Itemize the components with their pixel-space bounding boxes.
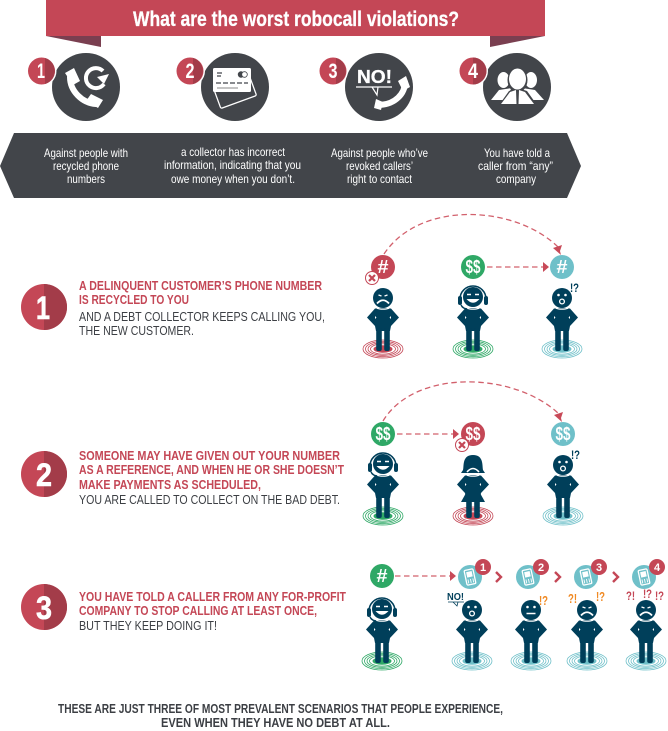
figure: you, call 4: !? <box>643 587 652 601</box>
figure: delinquent customer: # <box>378 257 388 277</box>
figure: debt collector: $$ <box>466 257 480 277</box>
icon: credit cards <box>175 53 269 121</box>
arrow: curved from customer to you <box>384 214 562 255</box>
text: violation 2 <box>164 145 301 186</box>
dark arrow band <box>0 133 581 198</box>
icon: no call: 3 <box>328 60 338 83</box>
figure: you: $$ <box>556 424 570 444</box>
text: violation 3: right to contact <box>347 172 413 186</box>
figure: debt collector <box>362 564 402 670</box>
text: violation 1: recycled phone <box>53 159 119 173</box>
figure: you: !? <box>570 281 579 295</box>
figure: you, call 4 <box>626 559 666 670</box>
chevron <box>555 572 560 582</box>
figure: reference woman <box>453 422 493 525</box>
chevron <box>613 572 618 582</box>
arrow: collector to you <box>395 571 456 581</box>
scenario 2 number: 2 <box>36 457 52 493</box>
title banner <box>46 0 545 47</box>
figure: you, call 4: !? <box>655 589 664 603</box>
figure: you, call 2: 2 <box>538 562 544 574</box>
scenario 2 text <box>79 448 344 507</box>
scenario 1 text: AND A DEBT COLLECTOR KEEPS CALLING YOU, <box>79 309 325 324</box>
scenario 2 text: SOMEONE MAY HAVE GIVEN OUT YOUR NUMBER <box>79 448 341 463</box>
chevron <box>496 572 501 582</box>
arrow: collector to you <box>487 262 549 272</box>
footer note: THESE ARE JUST THREE OF MOST PREVALENT SCENARIOS THAT PEOPLE EXPERIENCE, <box>58 702 503 716</box>
text: violation 2: a collector has incorrect <box>181 145 286 159</box>
figure: you, call 2 <box>511 559 551 670</box>
scenario 3 text: YOU HAVE TOLD A CALLER FROM ANY FOR-PROFIT <box>79 589 346 604</box>
text: violation 4 <box>478 146 553 186</box>
icon: no call <box>318 53 413 121</box>
text: violation 4: company <box>496 172 536 186</box>
scenario 3 diagram <box>362 559 666 670</box>
figure: you, call 3: !? <box>596 589 605 604</box>
icon: group of callers: 4 <box>468 60 478 83</box>
text: violation 1: Against people with <box>44 146 128 160</box>
scenario 3 text: COMPANY TO STOP CALLING AT LEAST ONCE, <box>79 603 317 618</box>
text: violation 3: Against people who’ve <box>331 146 428 160</box>
text: violation 2: owe money when you don’t. <box>171 172 295 186</box>
figure: you, call 1 <box>447 559 492 670</box>
figure: you: # <box>556 257 568 277</box>
figure: debt collector: $$ <box>376 424 390 444</box>
scenario 1 text <box>79 278 325 338</box>
title banner: What are the worst robocall violations? <box>133 8 459 31</box>
text: violation 4: caller from “any” <box>478 159 553 173</box>
figure: you <box>542 255 582 358</box>
figure: you, call 3: ?! <box>568 591 577 606</box>
scenario 3 number <box>21 584 67 630</box>
scenario 1 text: IS RECYCLED TO YOU <box>79 292 189 307</box>
scenario 2 text: YOU ARE CALLED TO COLLECT ON THE BAD DEBT. <box>79 492 340 507</box>
text: violation 4: You have told a <box>484 146 550 160</box>
scenario 2 text: MAKE PAYMENTS AS SCHEDULED, <box>79 477 261 492</box>
figure: you, call 1: 1 <box>480 562 486 574</box>
figure: reference woman: $$ <box>466 424 480 444</box>
icon: group of callers <box>458 53 551 121</box>
figure: debt collector <box>453 255 493 358</box>
figure: you: !? <box>571 448 580 462</box>
figure: you, call 3 <box>567 559 607 670</box>
figure: debt collector: # <box>376 566 388 586</box>
scenario 2 text: AS A REFERENCE, AND WHEN HE OR SHE DOESN’T <box>79 462 344 477</box>
text: violation 1: numbers <box>67 172 105 186</box>
icon: credit cards: 2 <box>186 60 194 83</box>
text: violation 1 <box>44 146 128 186</box>
scenario 1 number <box>21 284 67 330</box>
arrow: collector to reference <box>397 429 459 439</box>
figure: debt collector <box>363 422 403 525</box>
scenario 1 diagram <box>363 214 582 358</box>
text: violation 2: information, indicating that you <box>164 158 301 172</box>
figure: you, call 4: 4 <box>654 562 661 574</box>
scenario 3 text: BUT THEY KEEP DOING IT! <box>79 618 217 633</box>
figure: you, call 3: 3 <box>596 562 602 574</box>
icon: recycled phone number <box>26 53 120 121</box>
footer note: EVEN WHEN THEY HAVE NO DEBT AT ALL. <box>161 716 390 730</box>
figure: delinquent customer <box>363 255 403 358</box>
scenario 2 diagram <box>363 382 583 525</box>
arrow: curved from collector to you <box>383 382 563 422</box>
text: violation 3 <box>331 146 428 186</box>
figure: you, call 4: ?! <box>626 589 635 603</box>
icon: no call: NO! <box>357 67 392 87</box>
figure: you <box>543 422 583 525</box>
text: violation 3: revoked callers’ <box>346 159 413 173</box>
figure: you, call 2: !? <box>539 593 548 608</box>
scenario 2 number <box>21 451 67 497</box>
icon: recycled phone number: 1 <box>37 60 45 83</box>
scenario 1 text: A DELINQUENT CUSTOMER’S PHONE NUMBER <box>79 278 322 293</box>
figure: you, call 1: NO! <box>447 592 464 603</box>
scenario 3 text <box>79 589 346 633</box>
footer note <box>58 702 503 730</box>
scenario 1 text: THE NEW CUSTOMER. <box>79 323 194 338</box>
scenario 1 number: 1 <box>36 290 50 326</box>
scenario 3 number: 3 <box>36 590 52 626</box>
